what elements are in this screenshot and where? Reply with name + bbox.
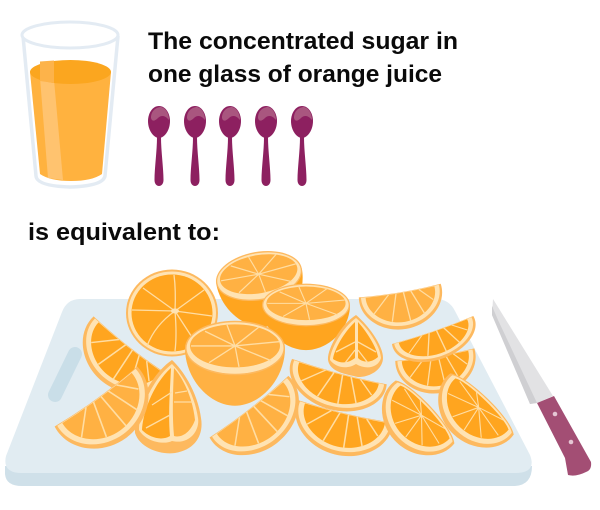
orange wedge: right stack lower (395, 348, 481, 399)
icon: glass of orange juice (22, 22, 118, 187)
orange wedge: middle upper (282, 359, 387, 422)
cutting board (5, 299, 532, 486)
orange half: centre (185, 321, 285, 406)
orange half: top (212, 245, 311, 334)
orange round slice (126, 270, 218, 356)
orange wedge: lower middle (209, 376, 317, 474)
orange wedge: lower right inner (365, 375, 460, 472)
orange wedge: top right (358, 284, 447, 336)
orange wedge: right stack upper (392, 316, 483, 373)
orange wedge: upper left (65, 316, 169, 411)
title: The concentrated sugar in (148, 28, 458, 55)
orange half: right (262, 284, 350, 350)
title (148, 28, 458, 88)
subheading: is equivalent to: (28, 219, 220, 246)
orange wedge: middle lower (287, 400, 393, 466)
title: one glass of orange juice (148, 61, 442, 88)
orange wedge: bottom left (54, 366, 168, 468)
icon: five spoons (148, 106, 313, 186)
orange heart-shaped wedge (328, 315, 383, 377)
orange teardrop wedge (135, 360, 202, 453)
icon: knife (492, 299, 591, 476)
orange wedge: lower right outer (421, 368, 519, 465)
